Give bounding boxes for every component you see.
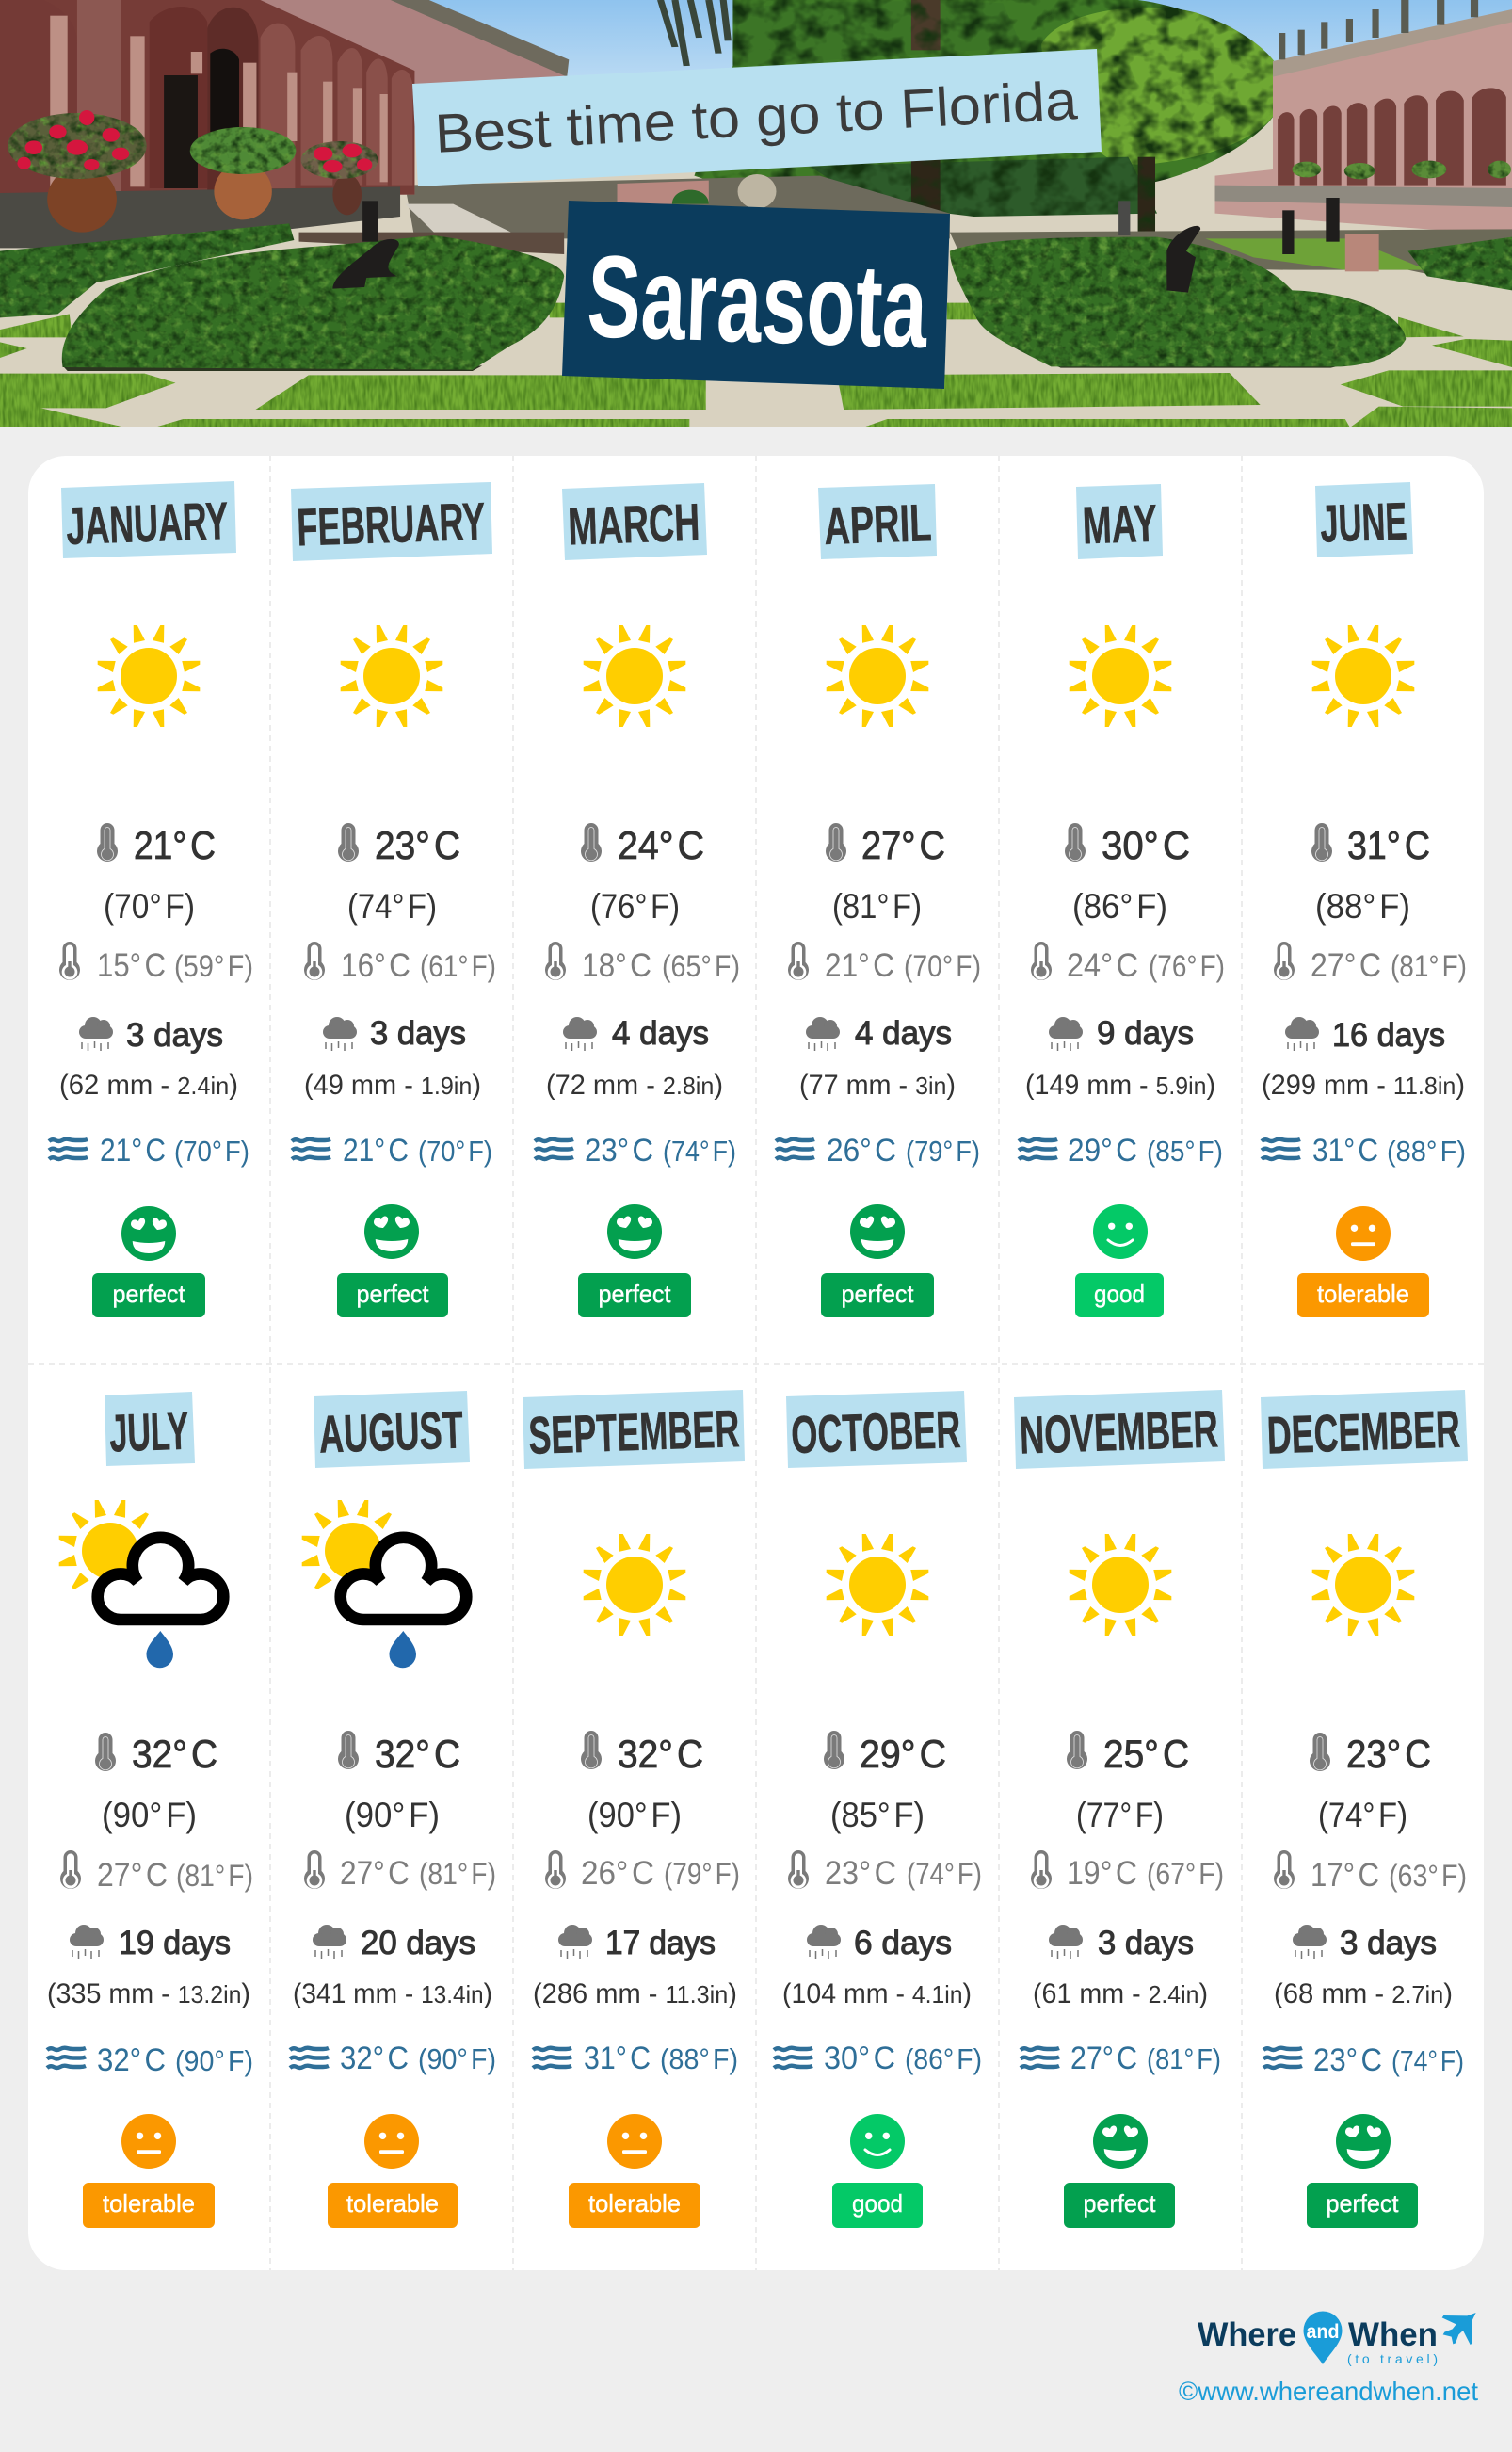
city banner: Sarasota bbox=[586, 232, 930, 373]
rain days bbox=[79, 1017, 223, 1054]
rainfall: (62 mm - 2.4in) bbox=[59, 1070, 238, 1101]
sea temperature bbox=[776, 1133, 980, 1169]
high temperature bbox=[338, 1731, 460, 1776]
high temperature: 29° C bbox=[860, 1732, 946, 1776]
rain days: 17 days bbox=[605, 1925, 716, 1961]
high temperature bbox=[581, 823, 704, 867]
panel: July bbox=[47, 1392, 253, 2228]
low temperature: (81° F) bbox=[419, 1857, 496, 1891]
low temperature: (76° F) bbox=[1149, 949, 1225, 983]
rain days: 19 days bbox=[119, 1925, 231, 1961]
high temperature bbox=[95, 1732, 217, 1776]
icon: sun bbox=[1070, 625, 1171, 727]
panel: February bbox=[291, 482, 496, 1317]
sea temperature: 26° C bbox=[827, 1133, 896, 1169]
icon: sun behind rain cloud bbox=[59, 1500, 223, 1668]
high temperature bbox=[1065, 823, 1190, 867]
sea temperature bbox=[533, 2041, 738, 2076]
icon: sun bbox=[584, 625, 685, 727]
high temperature Fahrenheit: (74° F) bbox=[347, 887, 437, 926]
high temperature: 32° C bbox=[618, 1732, 703, 1776]
high temperature bbox=[826, 823, 945, 867]
rating: tolerable bbox=[1297, 1206, 1429, 1317]
icon: sun bbox=[98, 625, 200, 727]
rating: good: good bbox=[1094, 1280, 1145, 1308]
lawns bbox=[0, 303, 1512, 427]
rain days bbox=[1049, 1925, 1194, 1961]
sea temperature: 31° C bbox=[1312, 1133, 1378, 1169]
high temperature Fahrenheit: (85° F) bbox=[830, 1796, 925, 1834]
rain days bbox=[807, 1925, 952, 1961]
icon: sun bbox=[827, 1534, 928, 1636]
header photo: Sarasota courtyard bbox=[0, 0, 1512, 427]
rainfall: (68 mm - 2.7in) bbox=[1274, 1978, 1453, 2009]
low temperature bbox=[59, 942, 253, 984]
sea temperature: 31° C bbox=[584, 2041, 651, 2076]
rating: tolerable bbox=[83, 2114, 215, 2228]
low temperature bbox=[60, 1850, 253, 1894]
low temperature: (81° F) bbox=[1391, 949, 1467, 983]
rain days: 4 days bbox=[855, 1015, 952, 1052]
panel: June bbox=[1262, 482, 1467, 1317]
month label: November bbox=[1014, 1390, 1225, 1469]
low temperature: 18° C bbox=[582, 947, 651, 984]
month label: October: OCTOBER bbox=[790, 1399, 961, 1464]
high temperature Fahrenheit: (88° F) bbox=[1315, 887, 1410, 926]
low temperature bbox=[304, 1850, 496, 1892]
high temperature Fahrenheit: (90° F) bbox=[587, 1796, 682, 1834]
sea temperature bbox=[535, 1133, 736, 1169]
panel: October bbox=[774, 1391, 982, 2228]
rating: good: good bbox=[852, 2189, 903, 2218]
icon: sun bbox=[1312, 625, 1414, 727]
sea temperature: 23° C bbox=[1313, 2042, 1382, 2078]
sea temperature: (90° F) bbox=[418, 2042, 496, 2075]
month label: May: MAY bbox=[1082, 493, 1158, 555]
high temperature: 27° C bbox=[861, 823, 945, 867]
sea temperature: (79° F) bbox=[906, 1135, 980, 1168]
rain days: 16 days bbox=[1332, 1017, 1445, 1054]
low temperature: 26° C bbox=[581, 1855, 654, 1892]
rating: perfect: perfect bbox=[842, 1280, 914, 1308]
sea temperature bbox=[292, 1133, 492, 1169]
sea temperature: 29° C bbox=[1068, 1133, 1137, 1169]
high temperature: 30° C bbox=[1102, 823, 1190, 867]
rainfall: (286 mm - 11.3in) bbox=[533, 1978, 737, 2009]
sea temperature: (74° F) bbox=[663, 1135, 736, 1168]
garden statues bbox=[332, 198, 1340, 293]
rating: tolerable: tolerable bbox=[588, 2189, 681, 2218]
rainfall: (104 mm - 4.1in) bbox=[782, 1978, 972, 2009]
low temperature: 16° C bbox=[341, 947, 410, 984]
rain days bbox=[1293, 1925, 1437, 1961]
panel: September bbox=[523, 1390, 745, 2228]
high temperature: 25° C bbox=[1103, 1732, 1189, 1776]
rain days: 3 days bbox=[1098, 1925, 1194, 1961]
sea temperature: (85° F) bbox=[1147, 1135, 1223, 1168]
title banner bbox=[412, 49, 1102, 186]
low temperature bbox=[1031, 1850, 1224, 1892]
month label: July bbox=[105, 1392, 195, 1466]
rating: perfect bbox=[1064, 2114, 1175, 2228]
rain days bbox=[806, 1015, 952, 1052]
low temperature: (79° F) bbox=[664, 1857, 740, 1891]
low temperature: 27° C bbox=[340, 1855, 410, 1892]
low temperature: (59° F) bbox=[174, 949, 253, 983]
hedges bbox=[0, 223, 1512, 371]
sea temperature: (74° F) bbox=[1391, 2044, 1464, 2077]
sea temperature: (86° F) bbox=[905, 2042, 982, 2075]
left balustrade and planters bbox=[0, 110, 400, 248]
sea temperature bbox=[47, 2042, 253, 2078]
rain days bbox=[70, 1925, 231, 1961]
rain days bbox=[1285, 1017, 1445, 1054]
low temperature: 24° C bbox=[1067, 947, 1138, 984]
high temperature: 21° C bbox=[134, 823, 216, 867]
month label: April: APRIL bbox=[823, 492, 932, 556]
panel: climate calendar card bbox=[28, 456, 1484, 2270]
rating: perfect bbox=[1307, 2114, 1418, 2228]
low temperature: (61° F) bbox=[420, 949, 496, 983]
sea temperature: (70° F) bbox=[174, 1135, 249, 1168]
month label: January: JANUARY bbox=[65, 491, 229, 556]
rainfall: (77 mm - 3in) bbox=[799, 1070, 956, 1101]
month label: June: JUNE bbox=[1319, 491, 1407, 554]
rain days: 3 days bbox=[370, 1015, 466, 1052]
high temperature Fahrenheit: (77° F) bbox=[1076, 1796, 1164, 1834]
rain days: 4 days bbox=[612, 1015, 709, 1052]
rainfall: (72 mm - 2.8in) bbox=[546, 1070, 723, 1101]
low temperature: 15° C bbox=[97, 947, 166, 984]
sea temperature: 21° C bbox=[100, 1133, 166, 1169]
high temperature: 32° C bbox=[132, 1732, 217, 1776]
high temperature: 24° C bbox=[618, 823, 704, 867]
panel: May bbox=[1019, 484, 1225, 1317]
high temperature Fahrenheit: (86° F) bbox=[1072, 887, 1167, 926]
rating: good bbox=[832, 2114, 923, 2228]
sea temperature: (88° F) bbox=[660, 2042, 738, 2075]
icon: sun bbox=[1070, 1534, 1171, 1636]
high temperature: 23° C bbox=[375, 823, 460, 867]
month label: November: NOVEMBER bbox=[1019, 1398, 1219, 1465]
panel: March bbox=[535, 483, 740, 1317]
panel: December bbox=[1261, 1390, 1468, 2228]
month label: May bbox=[1076, 484, 1163, 559]
high temperature: 32° C bbox=[375, 1732, 460, 1776]
rain days bbox=[1049, 1015, 1194, 1052]
panel: April bbox=[776, 484, 981, 1317]
rating: good bbox=[1075, 1204, 1164, 1317]
sea temperature: 27° C bbox=[1070, 2041, 1137, 2076]
city banner bbox=[562, 201, 950, 389]
rainfall: (335 mm - 13.2in) bbox=[47, 1978, 250, 2009]
website credit: ©www.whereandwhen.net bbox=[1179, 2377, 1478, 2406]
rating: perfect bbox=[92, 1206, 205, 1317]
low temperature: (63° F) bbox=[1389, 1859, 1467, 1893]
sea temperature: 23° C bbox=[585, 1133, 653, 1169]
month label: February bbox=[291, 482, 492, 561]
sea temperature: 32° C bbox=[340, 2041, 409, 2076]
rating: tolerable: tolerable bbox=[103, 2189, 195, 2218]
rain days: 6 days bbox=[854, 1925, 952, 1961]
low temperature: 19° C bbox=[1067, 1855, 1137, 1892]
low temperature bbox=[545, 942, 740, 984]
high temperature bbox=[824, 1731, 946, 1776]
right building bbox=[1215, 0, 1512, 235]
low temperature bbox=[1031, 942, 1225, 984]
rating: perfect bbox=[578, 1204, 691, 1317]
icon: sun bbox=[1312, 1534, 1414, 1636]
rainfall: (149 mm - 5.9in) bbox=[1025, 1070, 1215, 1101]
low temperature: 17° C bbox=[1311, 1857, 1379, 1894]
rain days bbox=[563, 1015, 709, 1052]
rainfall: (49 mm - 1.9in) bbox=[304, 1070, 481, 1101]
high temperature: 23° C bbox=[1346, 1732, 1431, 1776]
sea temperature bbox=[290, 2041, 496, 2076]
logo: Where and When: When bbox=[1348, 2316, 1438, 2353]
high temperature: 31° C bbox=[1347, 823, 1430, 867]
low temperature bbox=[304, 942, 496, 984]
low temperature bbox=[1274, 942, 1467, 984]
icon: sun bbox=[827, 625, 928, 727]
high temperature bbox=[97, 823, 216, 867]
sea temperature bbox=[1019, 1133, 1223, 1169]
high temperature Fahrenheit: (81° F) bbox=[832, 887, 922, 926]
rating: perfect bbox=[821, 1204, 934, 1317]
rating: tolerable: tolerable bbox=[1317, 1280, 1409, 1308]
rain days: 9 days bbox=[1097, 1015, 1194, 1052]
low temperature bbox=[788, 1850, 982, 1892]
sea temperature bbox=[1262, 1133, 1466, 1169]
rain days bbox=[558, 1925, 716, 1961]
high temperature Fahrenheit: (70° F) bbox=[104, 887, 195, 926]
month label: September bbox=[523, 1390, 745, 1469]
low temperature: 27° C bbox=[1311, 947, 1381, 984]
sea temperature: 30° C bbox=[824, 2041, 895, 2076]
sea temperature bbox=[49, 1133, 249, 1169]
logo: Where and When bbox=[1198, 2311, 1476, 2366]
rainfall: (341 mm - 13.4in) bbox=[293, 1978, 492, 2009]
sea temperature: (90° F) bbox=[175, 2044, 253, 2077]
low temperature bbox=[545, 1850, 740, 1892]
low temperature: (81° F) bbox=[176, 1859, 253, 1893]
sea temperature bbox=[774, 2041, 982, 2076]
low temperature: (74° F) bbox=[907, 1857, 982, 1891]
icon: sun bbox=[341, 625, 442, 727]
low temperature: 23° C bbox=[825, 1855, 896, 1892]
rain days: 20 days bbox=[361, 1925, 475, 1961]
low temperature bbox=[1274, 1850, 1467, 1894]
left building bbox=[0, 0, 569, 198]
rain days bbox=[323, 1015, 466, 1052]
month label: January bbox=[61, 481, 236, 558]
sea temperature bbox=[1021, 2041, 1221, 2076]
icon: sun bbox=[584, 1534, 685, 1636]
high temperature bbox=[1067, 1731, 1189, 1776]
high temperature Fahrenheit: (76° F) bbox=[590, 887, 680, 926]
month label: February: FEBRUARY bbox=[296, 492, 486, 557]
low temperature bbox=[788, 942, 981, 984]
high temperature bbox=[1310, 1732, 1431, 1776]
month label: April bbox=[818, 484, 937, 559]
panel: August bbox=[290, 1391, 496, 2228]
rating: perfect: perfect bbox=[599, 1280, 671, 1308]
icon: sun behind rain cloud bbox=[302, 1500, 466, 1668]
month label: March: MARCH bbox=[567, 492, 700, 556]
month label: March bbox=[562, 483, 707, 560]
sea temperature: 21° C bbox=[343, 1133, 409, 1169]
panel: November bbox=[1014, 1390, 1225, 2228]
rating: perfect: perfect bbox=[1083, 2189, 1156, 2218]
panel: January bbox=[49, 481, 253, 1317]
low temperature: 21° C bbox=[825, 947, 894, 984]
sea temperature: 32° C bbox=[97, 2042, 166, 2078]
low temperature: 27° C bbox=[97, 1857, 168, 1894]
high temperature bbox=[581, 1731, 703, 1776]
rating: tolerable bbox=[328, 2114, 458, 2228]
rating: perfect: perfect bbox=[113, 1280, 185, 1308]
logo: Where and When: and bbox=[1307, 2321, 1339, 2343]
high temperature bbox=[338, 823, 460, 867]
rating: perfect: perfect bbox=[1326, 2189, 1399, 2218]
high temperature Fahrenheit: (74° F) bbox=[1318, 1796, 1407, 1834]
low temperature: (70° F) bbox=[904, 949, 981, 983]
low temperature: (67° F) bbox=[1147, 1857, 1224, 1891]
month label: October bbox=[786, 1391, 967, 1468]
garden ground bbox=[299, 229, 1512, 273]
rating: perfect bbox=[337, 1204, 448, 1317]
high temperature Fahrenheit: (90° F) bbox=[102, 1796, 197, 1834]
high temperature bbox=[1311, 823, 1430, 867]
month label: August bbox=[314, 1391, 470, 1468]
rain days: 3 days bbox=[1340, 1925, 1437, 1961]
rainfall: (299 mm - 11.8in) bbox=[1262, 1070, 1465, 1101]
rating: perfect: perfect bbox=[356, 1280, 429, 1308]
rating: tolerable bbox=[569, 2114, 700, 2228]
rain days: 3 days bbox=[126, 1017, 223, 1054]
sea temperature: (70° F) bbox=[418, 1135, 492, 1168]
sea temperature: (81° F) bbox=[1147, 2042, 1221, 2075]
rating: tolerable: tolerable bbox=[346, 2189, 439, 2218]
logo: Where and When: Where bbox=[1198, 2316, 1296, 2353]
month label: August: AUGUST bbox=[318, 1399, 464, 1464]
month label: July: JULY bbox=[108, 1401, 189, 1462]
title banner: Best time to go to Florida bbox=[433, 70, 1079, 165]
month label: September: SEPTEMBER bbox=[527, 1398, 740, 1465]
sea temperature bbox=[1263, 2042, 1464, 2078]
month label: June bbox=[1315, 482, 1413, 557]
sea temperature: (88° F) bbox=[1387, 1135, 1466, 1168]
rainfall: (61 mm - 2.4in) bbox=[1033, 1978, 1208, 2009]
high temperature Fahrenheit: (90° F) bbox=[345, 1796, 440, 1834]
low temperature: (65° F) bbox=[662, 949, 740, 983]
logo: Where and When: (to travel) bbox=[1347, 2351, 1438, 2366]
